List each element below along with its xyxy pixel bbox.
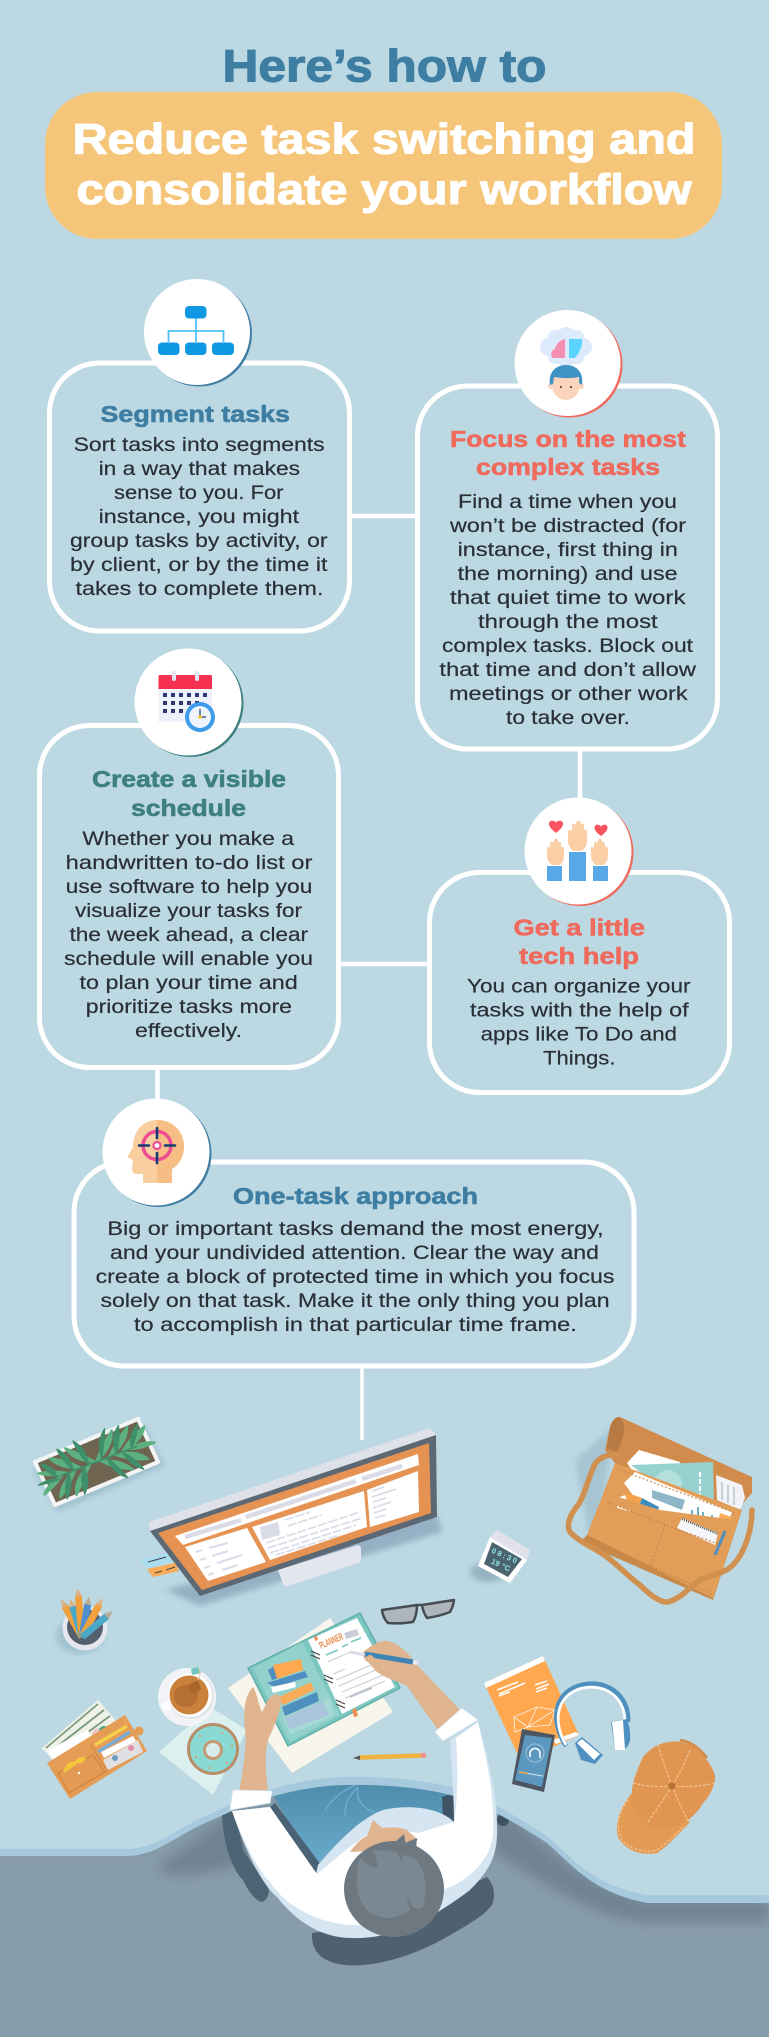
text: segment tasks body: sense to you. For	[114, 482, 284, 504]
heading: one-task approach: One-task approach	[233, 1183, 478, 1209]
heading: segment tasks: Segment tasks	[100, 401, 290, 427]
left cuff	[230, 1790, 272, 1810]
text: tech help body: You can organize your	[467, 975, 691, 997]
chair	[222, 1785, 509, 1965]
heading: tech help	[514, 915, 645, 969]
illustration: cap	[617, 1740, 715, 1854]
illustration: planner on papers	[228, 1613, 400, 1773]
title: Here's how to: Here’s how to	[222, 40, 546, 92]
text: one-task body: Big or important tasks demand the most energy,	[107, 1218, 604, 1240]
text: segment tasks body: group tasks by activity, or	[70, 530, 328, 552]
panel: one-task approach	[74, 1098, 634, 1366]
text: schedule body: the week ahead, a clear	[70, 924, 309, 946]
heading: focus: Focus on the most	[450, 426, 686, 452]
text: focus body: through the most	[478, 611, 658, 633]
title banner	[45, 92, 722, 239]
panel: focus on the most complex tasks	[418, 310, 718, 749]
heading: tech help: Get a little	[514, 915, 645, 941]
text: segment tasks body: instance, you might	[99, 506, 300, 528]
icon: calendar and clock	[134, 648, 244, 757]
pen	[350, 1652, 418, 1663]
illustration: napkin, coffee and donut	[158, 1667, 247, 1795]
text: segment tasks body	[70, 434, 328, 600]
illustration: plant tray	[28, 1414, 165, 1512]
text: schedule body: schedule will enable you	[64, 948, 313, 970]
arm and hand: right	[363, 1641, 460, 1730]
arm and hand: left	[239, 1687, 281, 1792]
text: focus body: meetings or other work	[449, 683, 688, 705]
title banner: Reduce task switching and	[72, 116, 696, 164]
illustration: desk clock	[470, 1530, 530, 1583]
text: schedule body: handwritten to-do list or	[66, 852, 313, 874]
illustration: phone	[512, 1729, 555, 1792]
heading: schedule: Create a visible	[92, 766, 286, 792]
illustration: monitor	[149, 1428, 442, 1606]
text: segment tasks body: Sort tasks into segments	[74, 434, 325, 456]
text: focus body: complex tasks. Block out	[442, 635, 694, 657]
text: tech help body: apps like To Do and	[481, 1023, 677, 1045]
text: clock display	[486, 1546, 519, 1574]
right cuff	[435, 1708, 478, 1741]
icon: raised hands	[524, 798, 634, 906]
torso and sleeves	[232, 1722, 493, 1925]
illustration: headphones	[556, 1684, 630, 1764]
text: focus body	[439, 491, 697, 729]
illustration: messenger bag	[568, 1417, 752, 1602]
text: schedule body	[64, 828, 313, 1042]
icon: brain and head	[514, 310, 622, 418]
text: clock display: 19 °C	[490, 1557, 512, 1573]
illustration: pencil cup	[56, 1588, 115, 1654]
text: schedule body: to plan your time and	[80, 972, 298, 994]
floor	[0, 1770, 769, 2037]
text: schedule body: use software to help you	[66, 876, 312, 898]
title banner: consolidate your workflow	[76, 166, 692, 214]
panel: get a little tech help	[430, 798, 730, 1092]
text: focus body: that time and don’t allow	[439, 659, 697, 681]
illustration: wallet	[42, 1700, 147, 1799]
text: segment tasks body: by client, or by the time it	[70, 554, 328, 576]
illustration: sticky notes	[141, 1553, 179, 1577]
icon: hierarchy	[144, 279, 252, 386]
text: one-task body: to accomplish in that particular time frame.	[134, 1314, 577, 1336]
illustration: person at desk	[230, 1641, 497, 1938]
text: schedule body: prioritize tasks more	[86, 996, 292, 1018]
heading: tech help: tech help	[519, 943, 639, 969]
text: clock display: 08:30	[490, 1546, 519, 1565]
text: one-task body: and your undivided attention. Clear the way and	[110, 1242, 599, 1264]
panel: segment tasks	[50, 279, 350, 631]
text: focus body: won’t be distracted (for	[449, 515, 687, 537]
desk shadow on floor	[160, 1805, 769, 1922]
illustration: glasses	[382, 1600, 454, 1623]
panel: create a visible schedule	[40, 648, 338, 1068]
text: focus body: that quiet time to work	[450, 587, 686, 609]
text: focus body: to take over.	[506, 707, 630, 729]
text: focus body: instance, first thing in	[458, 539, 678, 561]
text: one-task body	[96, 1218, 615, 1336]
text: focus body: Find a time when you	[458, 491, 677, 513]
text: focus body: the morning) and use	[458, 563, 678, 585]
icon: head with target	[102, 1098, 212, 1207]
heading: schedule: schedule	[131, 795, 246, 821]
illustration: pencil on desk	[353, 1755, 426, 1760]
text: one-task body: solely on that task. Make it the only thing you plan	[100, 1290, 610, 1312]
text: schedule body: effectively.	[135, 1020, 242, 1042]
text: one-task body: create a block of protected time in which you focus	[96, 1266, 615, 1288]
head	[344, 1820, 444, 1937]
illustration: orange book	[484, 1656, 579, 1753]
text: segment tasks body: takes to complete them.	[76, 578, 324, 600]
heading: focus	[450, 426, 686, 480]
heading: focus: complex tasks	[476, 454, 660, 480]
torso and sleeves shadow	[232, 1722, 497, 1938]
text: segment tasks body: in a way that makes	[99, 458, 300, 480]
text: schedule body: visualize your tasks for	[75, 900, 303, 922]
text: tech help body: tasks with the help of	[470, 999, 689, 1021]
desk	[0, 1440, 769, 1903]
text: planner label: PLANNER	[318, 1631, 345, 1652]
connector lines	[158, 516, 580, 1442]
text: tech help body	[467, 975, 691, 1069]
text: schedule body: Whether you make a	[82, 828, 294, 850]
text: tech help body: Things.	[543, 1047, 616, 1069]
heading: schedule	[92, 766, 286, 821]
